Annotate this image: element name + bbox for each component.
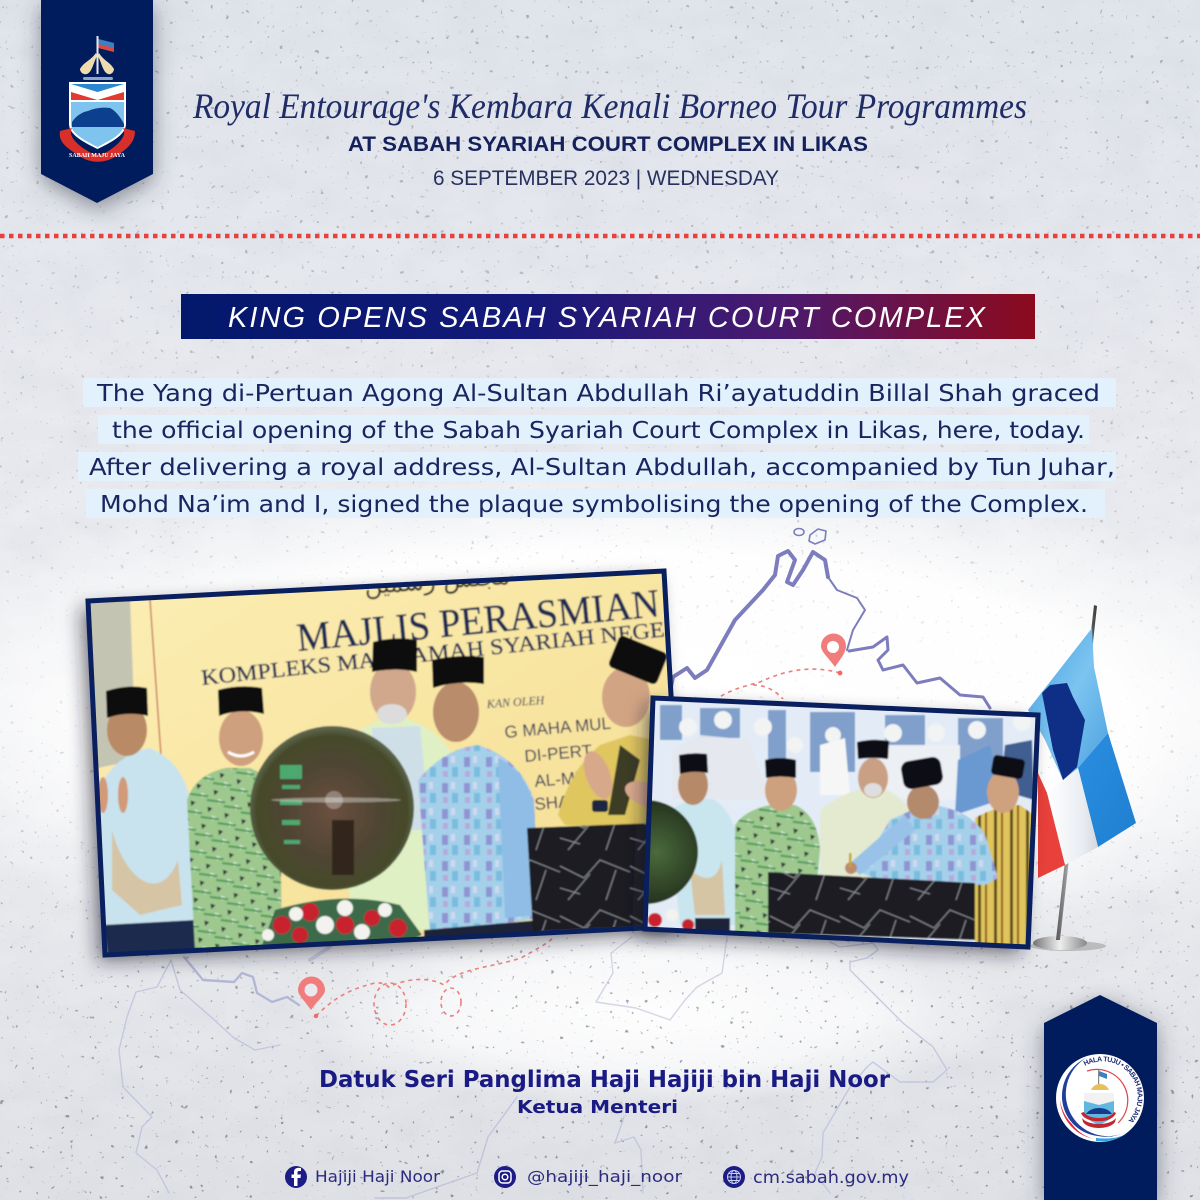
signatory name and title: Datuk Seri Panglima Haji Hajiji bin Haji Noor	[319, 1067, 891, 1093]
background workers	[672, 711, 1034, 815]
social: Instagram	[494, 1166, 682, 1188]
icon: Sabah flag on pole	[1028, 605, 1136, 951]
person 3	[348, 637, 450, 931]
social: Facebook	[285, 1166, 440, 1188]
event backdrop text: DI-PERT	[524, 741, 593, 766]
headline banner	[181, 294, 1035, 339]
event backdrop text: مجلس رسمين	[363, 562, 511, 600]
event backdrop text: KAN OLEH	[485, 693, 546, 711]
ribbon with Hala Tuju logo, bottom right	[1028, 989, 1172, 1200]
date: 6 SEPTEMBER 2023 | WEDNESDAY	[433, 167, 779, 190]
ribbon with Sabah crest, top left	[41, 0, 153, 203]
event backdrop text: KOMPLEKS MAHKAMAH SYARIAH NEGERI	[200, 614, 690, 690]
person 1	[98, 687, 195, 960]
body paragraph with highlighted lines: The Yang di-Pertuan Agong Al-Sultan Abdullah Ri’ayatuddin Billal Shah graced	[96, 381, 1100, 407]
social: Instagram: @hajiji_haji_noor	[527, 1167, 682, 1187]
event backdrop text: AL-MU	[534, 767, 588, 791]
body paragraph with highlighted lines: After delivering a royal address, Al-Sultan Abdullah, accompanied by Tun Juhar,	[89, 455, 1115, 481]
map of Sabah: lower faded outline	[119, 937, 947, 1198]
flower arrangement	[262, 899, 422, 945]
icon: Hala Tuju logo badge	[1056, 1054, 1144, 1142]
icon: Sabah coat of arms: SABAH MAJU JAYA	[69, 153, 126, 159]
event backdrop text: MAJLIS PERASMIAN	[295, 580, 661, 660]
building backdrop	[659, 704, 1004, 773]
flowers	[648, 909, 730, 932]
body paragraph with highlighted lines: Mohd Na’im and I, signed the plaque symbolising the opening of the Complex.	[100, 492, 1088, 518]
script heading: Royal Entourage's Kembara Kenali Borneo Tour Programmes	[192, 86, 1027, 126]
map of Sabah: upper outline	[670, 528, 990, 708]
map pin and dotted route: lower	[298, 938, 553, 1025]
marble plaque	[768, 872, 975, 940]
social: Facebook: Hajiji Haji Noor	[315, 1167, 440, 1186]
photo: King pressing the launch sphere	[80, 562, 690, 965]
signatory name and title: Ketua Menteri	[517, 1097, 678, 1118]
title block	[192, 86, 1027, 190]
launch sphere	[250, 726, 414, 890]
launch sphere	[648, 800, 699, 905]
subheading: AT SABAH SYARIAH COURT COMPLEX IN LIKAS	[348, 133, 868, 156]
person 1	[674, 752, 736, 926]
icon: Hala Tuju logo badge: HALA TUJU • SABAH MAJU JAYA	[1083, 1056, 1142, 1122]
photo: King signing the plaque	[594, 695, 1040, 950]
person 2	[735, 758, 820, 935]
icon: Sabah coat of arms	[60, 36, 135, 162]
person 4: the King	[418, 656, 540, 950]
event backdrop text: SHAH	[534, 791, 582, 814]
marble plaque	[526, 822, 646, 931]
person 5	[975, 754, 1034, 945]
signatory name and title	[319, 1067, 891, 1118]
event backdrop text	[200, 582, 665, 811]
person 2	[187, 686, 282, 950]
body paragraph with highlighted lines	[78, 378, 1116, 518]
headline banner: KING OPENS SABAH SYARIAH COURT COMPLEX	[228, 302, 987, 334]
event backdrop text: G MAHA MUL	[504, 714, 612, 742]
person 3	[820, 740, 912, 880]
body paragraph with highlighted lines: the official opening of the Sabah Syariah Court Complex in Likas, here, today.	[112, 418, 1085, 444]
social: website: cm.sabah.gov.my	[753, 1168, 909, 1188]
person 5	[558, 635, 666, 826]
person 4: the King signing	[845, 756, 998, 885]
map pin and dotted route: upper	[718, 634, 846, 699]
